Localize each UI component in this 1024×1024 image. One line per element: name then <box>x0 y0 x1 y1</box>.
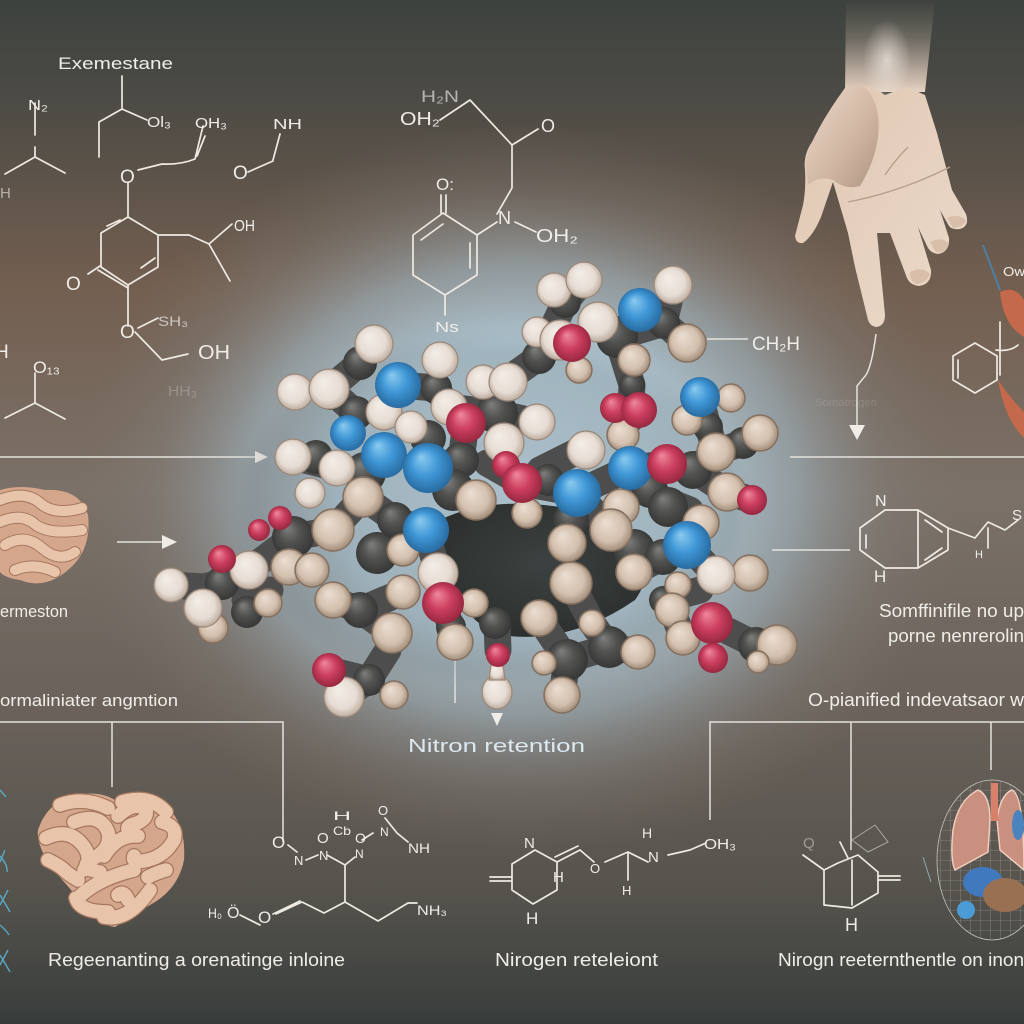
chemical structure: bottom left centre: O <box>272 833 285 852</box>
chemical structure: top centre: O <box>541 116 555 136</box>
chemical structure: right middle: S <box>1012 507 1022 524</box>
chemical structure: top left: OH <box>234 218 255 235</box>
tan hydrogen atoms <box>198 324 797 713</box>
chemical structure: top centre: H₂N <box>421 87 459 106</box>
bond network <box>171 280 777 697</box>
3D molecule model <box>154 262 797 717</box>
chemical structure: top left: O <box>66 274 81 295</box>
label: Nitron retention: Nitron retention <box>408 736 585 756</box>
chemical structure: bottom left centre: N <box>294 853 303 868</box>
red oxygen atoms <box>208 324 767 687</box>
chemical structure: bottom centre: H <box>622 883 631 898</box>
chemical structure: top left: O <box>120 167 135 188</box>
label: Regenerating caption: Regeenanting a orenatinge inloine <box>48 950 345 970</box>
mesh annotation <box>923 857 931 882</box>
chemical structure: bottom centre: N <box>524 835 535 852</box>
chemical structure: top left: HH₃ <box>168 383 197 400</box>
chemical structure: bottom left centre: O <box>378 803 388 818</box>
label: O-pianified indevatsaor: O-pianified indevatsaor w <box>808 690 1024 710</box>
chemical structure: bottom centre: H <box>642 825 652 841</box>
wrist <box>845 0 935 92</box>
chemical structure: right middle <box>860 493 1022 586</box>
label: right text block <box>879 601 1024 646</box>
chemical structure: bottom left centre: N <box>355 847 364 861</box>
hand outline <box>795 85 967 327</box>
chemical structure: top left: OH <box>198 342 230 364</box>
label: right text block: Somffinifile no up <box>879 601 1024 621</box>
chemical structure: top centre <box>400 87 578 336</box>
chemical structure: top left: O <box>120 322 135 343</box>
chemical structure: bottom left centre: N <box>319 848 328 863</box>
chemical structure: bottom left centre: O <box>355 830 366 846</box>
chemical structure: bottom right centre: Q <box>803 835 815 852</box>
DNA strand fragments: bottom left edge <box>0 790 10 972</box>
chemical structure: top centre: OH₂ <box>400 109 440 129</box>
blue nitrogen atoms <box>330 288 720 569</box>
label: Nitrogen treatment caption: Nirogn reeternthentle on inon <box>778 950 1024 970</box>
chemical structure and gland: right edge <box>953 245 1024 438</box>
chemical structure: bottom right centre <box>803 825 900 935</box>
label: CH2H: CH₂H <box>752 334 800 355</box>
chemical structure: bottom left centre: O <box>317 830 329 847</box>
hand illustration <box>795 0 967 327</box>
faint label under hand: Somatrogen <box>815 397 877 409</box>
label: left meston: ermeston <box>0 602 68 621</box>
fingernails and finger joints <box>910 216 966 284</box>
thumb mound <box>806 85 879 187</box>
molecule shadow <box>240 340 740 680</box>
chemical structure: bottom centre: OH₃ <box>704 836 736 853</box>
chemical structure: top left: O <box>233 163 248 184</box>
chemical structure: top left <box>0 76 302 419</box>
brain icon: left <box>0 487 89 583</box>
chemical structure: top left: N₂ <box>28 97 48 114</box>
anatomical illustration: lungs and organs in mesh <box>923 780 1024 940</box>
chemical structure: top centre: Ns <box>435 319 459 336</box>
wrist highlight <box>863 20 911 100</box>
chemical structure: top centre: O: <box>436 175 454 194</box>
chemical structure: right middle: N <box>875 493 887 510</box>
chemical structure: bottom centre <box>490 825 736 928</box>
chemical structure: top left: NH <box>273 116 302 133</box>
dark molecular core <box>440 504 647 637</box>
chemical structure: bottom left centre: H <box>333 809 351 823</box>
connector lines and arrows <box>0 334 1024 850</box>
chemical structure: bottom centre: H <box>526 909 538 928</box>
chemical structure: bottom right centre: H <box>845 915 858 935</box>
chemical structure: bottom left centre: N <box>380 825 389 839</box>
label: Nitrogen caption: Nirogen reteleiont <box>495 950 658 970</box>
title label: Exemestane: Exemestane <box>58 54 173 73</box>
chemical structure: top left: Ol₃ <box>147 114 171 131</box>
chemical structure: top left: O₁₃ <box>33 358 60 377</box>
trachea <box>991 783 998 821</box>
chemical structure: bottom left centre: H₀ <box>208 905 222 921</box>
label: left angmtion: ormaliniater angmtion <box>0 691 178 710</box>
chemical structure: top left: H <box>0 185 11 202</box>
dark carbon atoms <box>205 286 774 696</box>
chemical structure: bottom left centre: Cb <box>333 824 351 838</box>
chemical structure: bottom centre: N <box>648 849 659 866</box>
left lung <box>952 790 990 870</box>
chemical structure: bottom left centre: O <box>258 908 271 927</box>
palm creases <box>848 147 950 202</box>
brain illustration: bottom <box>38 793 184 927</box>
chemical structure: bottom left centre: NH <box>408 840 430 856</box>
label: right text block: porne nenrerolin <box>888 626 1024 646</box>
chemical structure: bottom centre: H <box>553 869 564 886</box>
chemical structure: top left: SH₃ <box>158 313 188 329</box>
chemical structure and gland: right edge: Ow <box>1003 264 1024 279</box>
chemical structure: bottom centre: O <box>590 861 600 876</box>
chemical structure: top left: OH₃ <box>195 115 227 132</box>
right lung <box>997 790 1024 870</box>
pale hydrogen atoms <box>154 262 735 717</box>
chemical structure: right middle: H <box>975 549 983 561</box>
chemical structure: bottom left centre: Ö <box>227 904 239 922</box>
chemical structure: top centre: N <box>498 208 511 228</box>
abdominal organs <box>957 810 1024 919</box>
chemical structure: bottom left centre: NH₃ <box>417 902 447 918</box>
chemical structure: bottom left centre <box>208 803 447 927</box>
chemical structure: top centre: OH₂ <box>536 226 578 246</box>
chemical structure: right middle: H <box>874 567 886 586</box>
